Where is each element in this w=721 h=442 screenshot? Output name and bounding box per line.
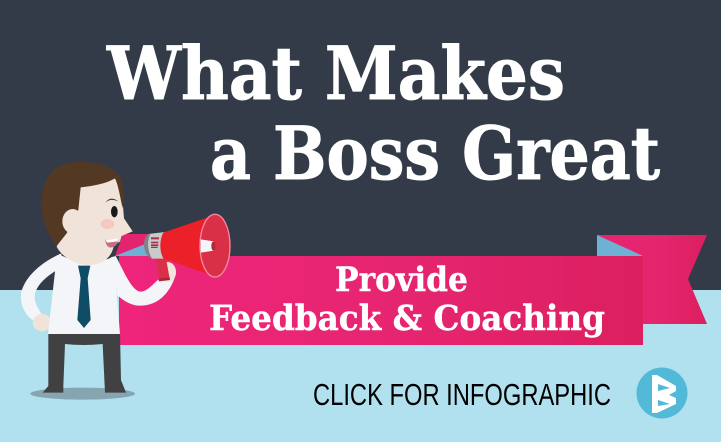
- cheek: [100, 219, 114, 229]
- hair: [42, 162, 123, 246]
- megaphone handle: [156, 258, 170, 281]
- shadow: [30, 388, 135, 400]
- title: [106, 31, 660, 197]
- head and neck: [57, 178, 133, 265]
- ribbon: left tail fold: [115, 234, 170, 256]
- eyebrow: [105, 199, 119, 203]
- background: light blue lower panel: [0, 290, 721, 442]
- shirt: [48, 254, 120, 334]
- title: What Makes: [106, 31, 565, 117]
- ribbon text: [209, 260, 605, 339]
- left hand: [33, 314, 51, 331]
- right hand: [159, 262, 176, 282]
- trousers: [43, 333, 126, 393]
- eye: [111, 206, 118, 217]
- megaphone body: [144, 214, 230, 277]
- illustration: businessman with megaphone: [21, 162, 230, 400]
- right arm: [111, 256, 176, 306]
- tie: [77, 266, 91, 328]
- ribbon text: Provide: [335, 260, 468, 300]
- call to action text: CLICK FOR INFOGRAPHIC: [313, 377, 611, 412]
- ribbon text: Feedback & Coaching: [209, 298, 605, 339]
- left arm: [21, 253, 62, 321]
- ear: [62, 209, 83, 234]
- ribbon: main banner: [119, 256, 643, 345]
- title: a Boss Great: [210, 111, 660, 197]
- ribbon: right tail: [597, 235, 707, 324]
- icon: logo badge: [636, 368, 688, 418]
- mouth: [105, 238, 119, 248]
- background: dark upper panel: [0, 0, 721, 290]
